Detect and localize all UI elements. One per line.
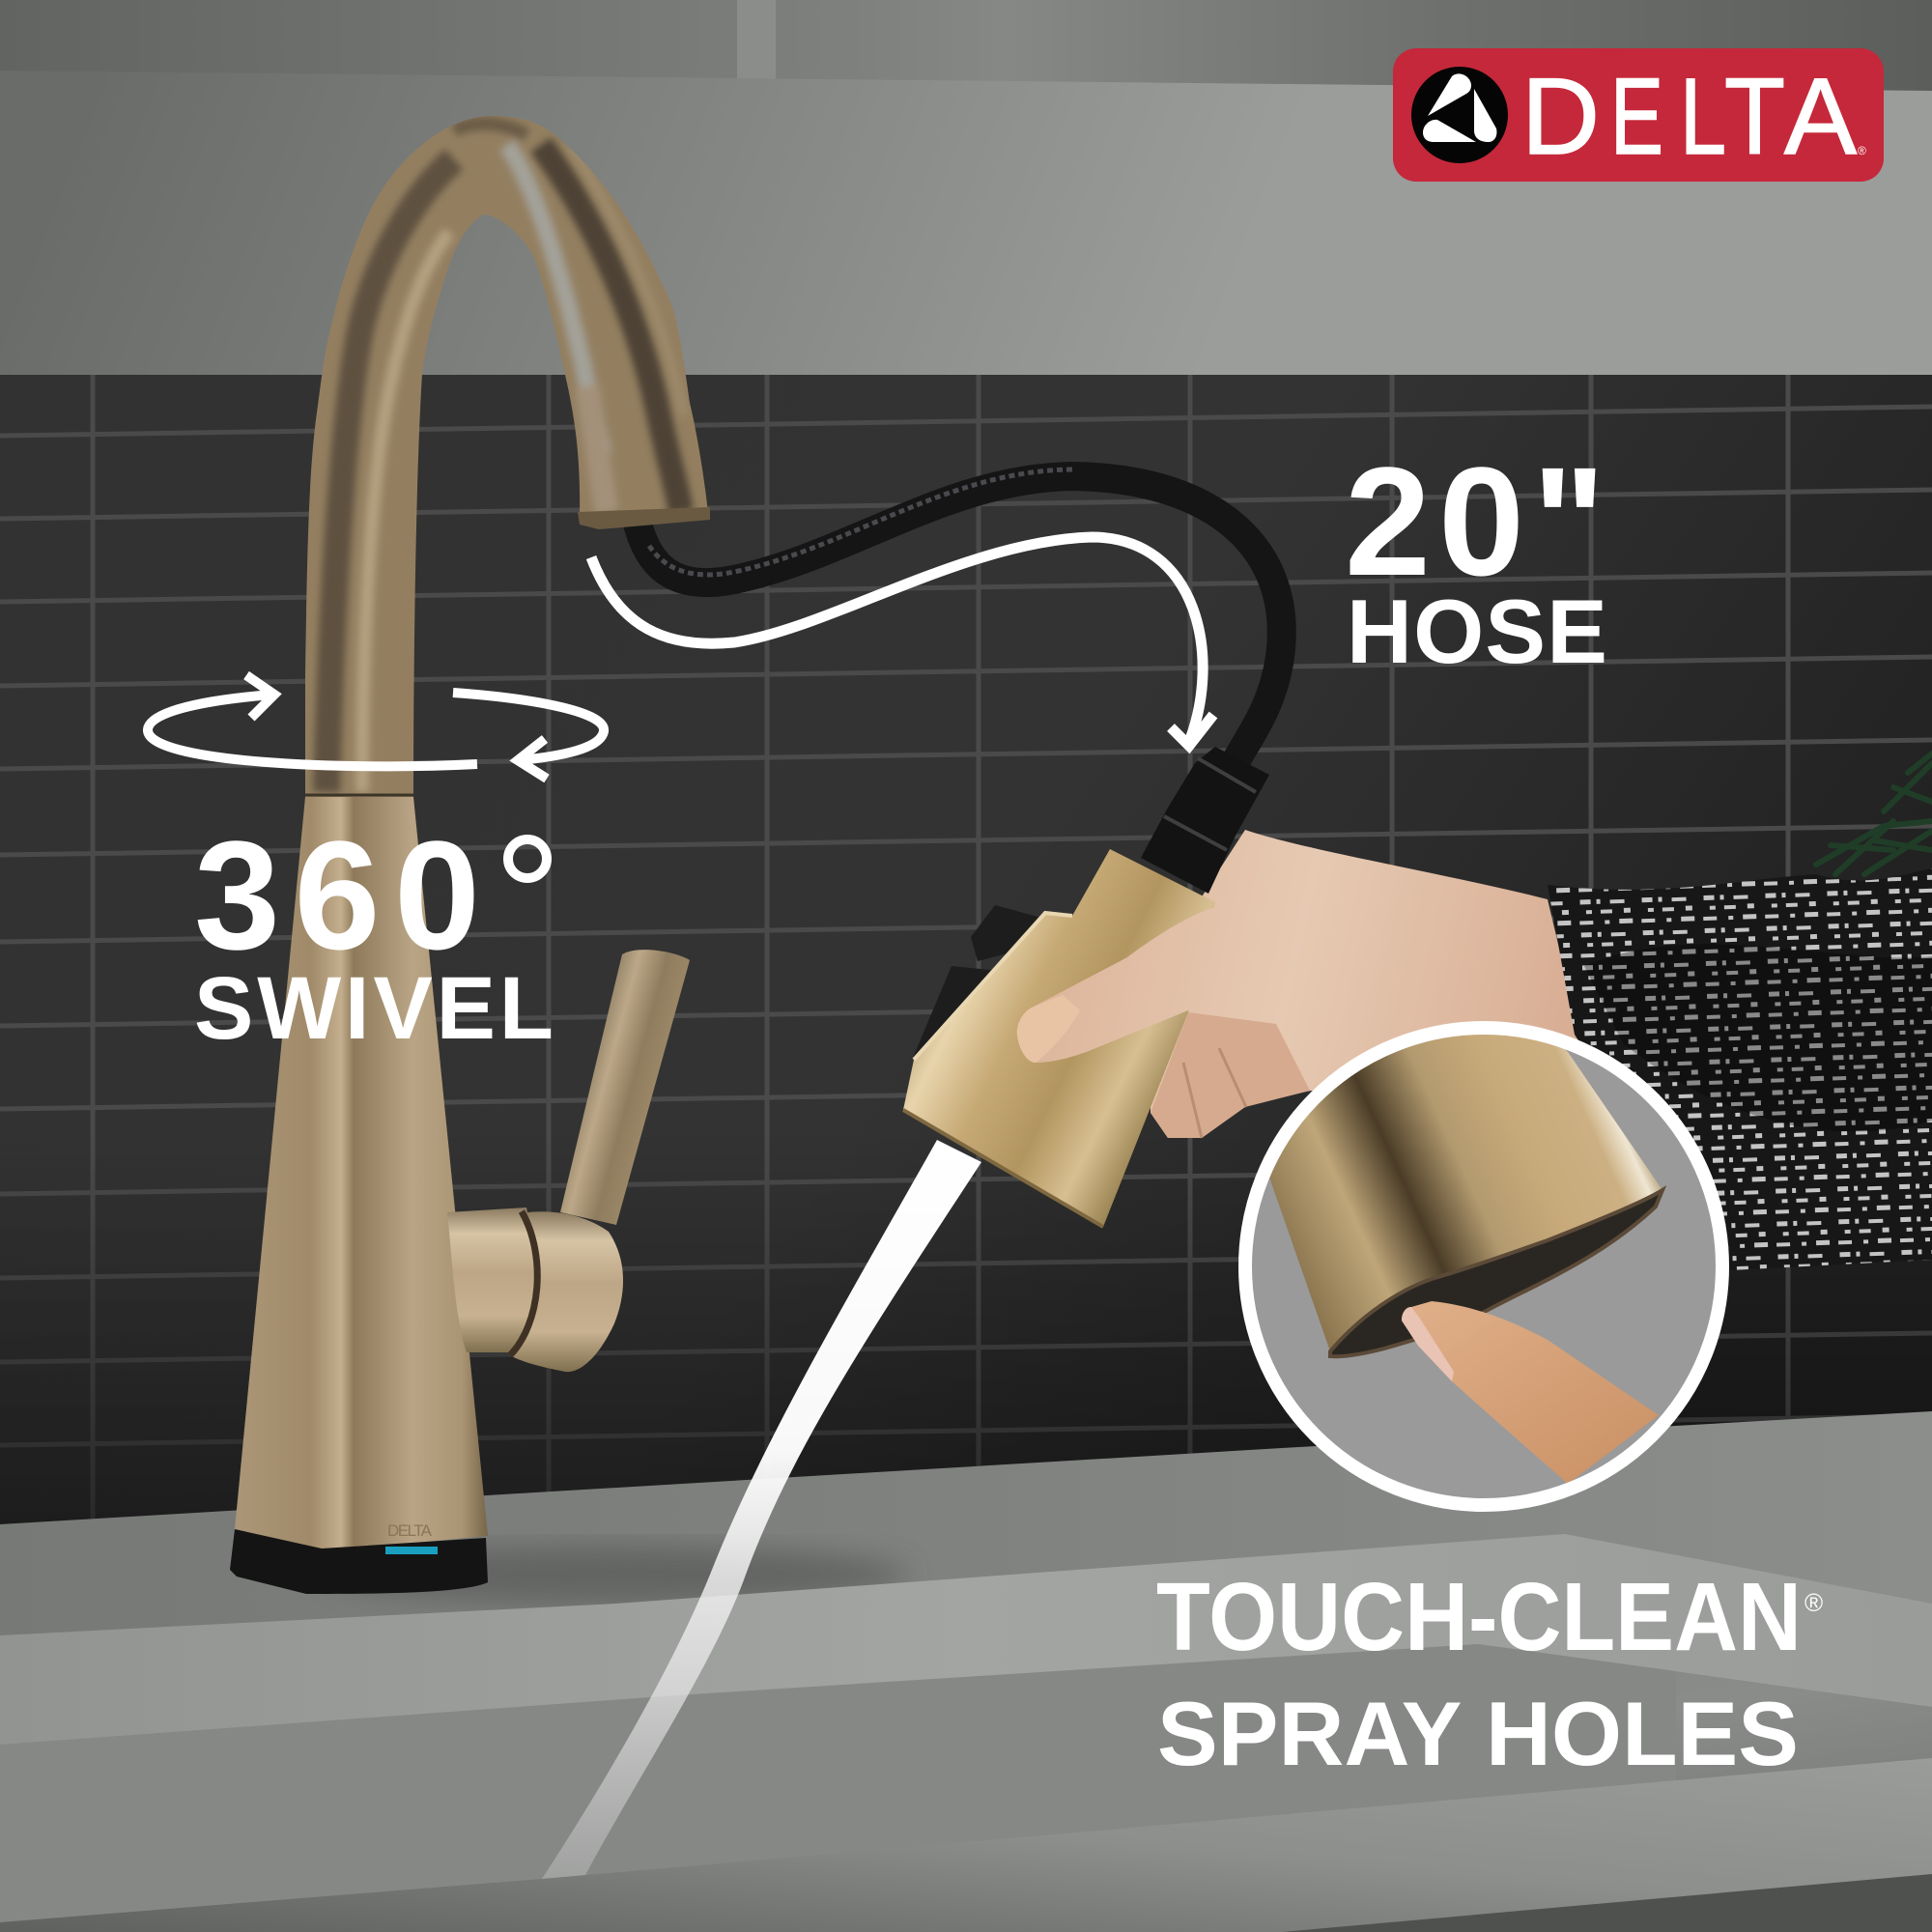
hand: back of hand and fingers xyxy=(1150,830,1584,1138)
heading: 360 degree swivel: SWIVEL xyxy=(194,959,554,1058)
wordmark: ® xyxy=(1858,144,1866,157)
swivel rotation arrows xyxy=(148,675,604,779)
wordmark: D xyxy=(1521,56,1600,177)
faucet: tapered base body: DELTA xyxy=(387,1521,433,1540)
heading: 20 inch hose: HOSE xyxy=(1347,581,1607,682)
magnified detail circle xyxy=(1242,995,1725,1508)
plant behind sleeve xyxy=(1816,753,1932,874)
wordmark xyxy=(1521,56,1866,177)
water stream xyxy=(542,1140,981,1879)
heading: 20 inch hose: 20" xyxy=(1345,435,1605,608)
heading: 20 inch hose xyxy=(1345,435,1607,682)
spray head xyxy=(903,747,1269,1227)
wordmark: L xyxy=(1680,56,1726,177)
wordmark: E xyxy=(1610,56,1663,177)
heading: touch-clean spray holes: TOUCH-CLEAN xyxy=(1156,1563,1802,1671)
faucet: pull-down hose xyxy=(635,469,1282,763)
heading: touch-clean spray holes xyxy=(1156,1563,1823,1784)
faucet: handle lever and hub xyxy=(447,950,690,1372)
hose travel arrow xyxy=(591,537,1213,746)
faucet: tapered base body xyxy=(230,797,488,1594)
heading: 360 degree swivel xyxy=(194,809,554,1058)
wordmark: T xyxy=(1724,56,1785,177)
fingertip xyxy=(1402,1301,1659,1484)
faucet: gooseneck spout xyxy=(305,116,710,797)
background: upper wall xyxy=(0,0,1932,379)
wordmark: A xyxy=(1784,56,1857,177)
Delta logo badge xyxy=(1393,48,1884,182)
sleeve xyxy=(1548,868,1932,1270)
heading: touch-clean spray holes: ® xyxy=(1804,1588,1823,1617)
heading: 360 degree swivel: 360 xyxy=(194,809,480,981)
logo mark xyxy=(1423,73,1496,142)
sprayer nozzle close-up xyxy=(1269,1035,1662,1350)
counter and sink xyxy=(0,1411,1932,1932)
heading: touch-clean spray holes: SPRAY HOLES xyxy=(1157,1683,1799,1784)
spray holes face xyxy=(1330,1190,1662,1356)
hand: thumb xyxy=(1017,907,1276,1063)
background: tile backsplash xyxy=(0,375,1932,1546)
